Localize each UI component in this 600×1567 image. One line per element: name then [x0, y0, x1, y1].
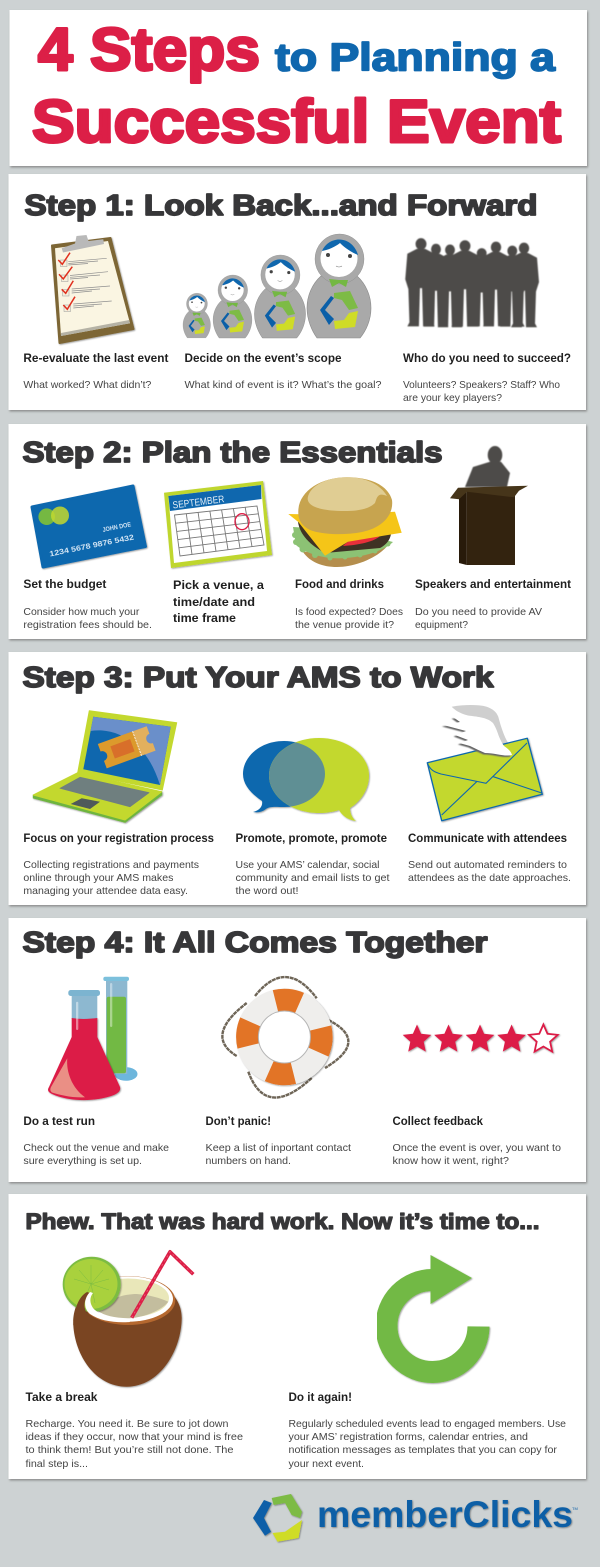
heading: step 4: Step 4: It All Comes Together: [22, 927, 488, 959]
text: communicate: Send out automated reminders to: [408, 859, 567, 871]
text: do it again: your AMS’ registration forms, calendar entries, and: [288, 1431, 528, 1443]
heading: step 1: Step 1: Look Back...and Forward: [24, 190, 538, 222]
text: feedback: [392, 1114, 561, 1167]
text: who: [403, 351, 571, 404]
text: budget: Set the budget: [23, 577, 106, 591]
heading: step 3: Step 3: Put Your AMS to Work: [22, 662, 494, 694]
text: speakers: Speakers and entertainment: [415, 577, 571, 591]
text: registration: managing your attendee data easy.: [23, 885, 188, 897]
text: food: Is food expected? Does: [295, 606, 403, 618]
text: take a break: [26, 1390, 243, 1470]
text: re-evaluate: [23, 351, 168, 391]
text: scope: Decide on the event’s scope: [184, 351, 342, 365]
text: scope: [184, 351, 382, 391]
logo wordmark: memberClicks: [317, 1494, 573, 1535]
icon: credit card: JOHN DOE: [102, 521, 132, 534]
text: budget: registration fees should be.: [23, 619, 152, 631]
text: speakers: [415, 577, 571, 631]
heading: closing: Phew. That was hard work. Now it’s time to...: [26, 1209, 540, 1234]
title: to Planning a: to Planning a: [275, 36, 555, 80]
logo: memberClicks: [253, 1494, 578, 1542]
text: budget: [23, 577, 152, 631]
text: scope: What kind of event is it? What’s the goal?: [184, 379, 382, 391]
icon: nesting dolls: [183, 234, 371, 338]
text: promote: [236, 831, 390, 897]
icon: speaker at podium: [450, 446, 528, 565]
text: feedback: Collect feedback: [392, 1114, 483, 1128]
icon: speech bubbles: [243, 738, 369, 821]
text: communicate: Communicate with attendees: [408, 831, 567, 845]
panel: step 1: [8, 174, 587, 412]
text: communicate: attendees as the date approaches.: [408, 872, 571, 884]
title: 4 Steps: 4 Steps: [38, 16, 260, 83]
text: do it again: Do it again!: [288, 1390, 352, 1404]
text: don't panic: [206, 1114, 351, 1167]
text: promote: the word out!: [236, 885, 298, 897]
text: venue: [173, 578, 264, 625]
trademark: TM: [572, 1506, 578, 1511]
text: take a break: final step is...: [26, 1458, 88, 1470]
panel: step 3: [8, 652, 587, 906]
text: food: Food and drinks: [295, 577, 384, 591]
icon: four of five stars: [403, 1024, 558, 1052]
text: test run: sure everything is set up.: [23, 1155, 142, 1167]
icon: life preserver: [222, 977, 348, 1098]
text: do it again: [288, 1390, 566, 1470]
panel: title: [10, 10, 588, 168]
text: re-evaluate: Re-evaluate the last event: [23, 351, 168, 365]
logo mark: [253, 1494, 302, 1542]
text: budget: Consider how much your: [23, 606, 140, 618]
panel: step 4: [8, 918, 587, 1184]
text: promote: community and email lists to get: [236, 872, 390, 884]
text: do it again: notification messages as templates that you can copy for: [288, 1444, 558, 1456]
text: do it again: your next event.: [288, 1458, 364, 1470]
icon: calendar: SEPTEMBER: [172, 494, 225, 511]
text: venue: time/date and: [173, 595, 255, 609]
text: take a break: ideas if they occur, now that your mind is free: [26, 1431, 243, 1443]
text: take a break: Recharge. You need it. Be sure to jot down: [26, 1418, 229, 1430]
text: registration: Collecting registrations and payments: [23, 859, 199, 871]
heading: step 2: Step 2: Plan the Essentials: [22, 437, 442, 469]
icon: burger: [288, 477, 402, 567]
icon: credit card: [32, 486, 146, 567]
icon: credit card: 1234 5678 9876 5432: [49, 532, 135, 558]
text: communicate: [408, 831, 571, 884]
text: do it again: Regularly scheduled events lead to engaged members. Use: [288, 1418, 566, 1430]
text: feedback: know how it went, right?: [392, 1155, 509, 1167]
icon: flasks: [48, 977, 138, 1100]
text: test run: Check out the venue and make: [23, 1142, 169, 1154]
text: take a break: Take a break: [26, 1390, 98, 1404]
text: registration: online through your AMS makes: [23, 872, 173, 884]
icon: winged envelope: [427, 705, 542, 821]
text: food: the venue provide it?: [295, 619, 394, 631]
text: venue: time frame: [173, 611, 236, 625]
text: registration: Focus on your registration process: [23, 831, 214, 845]
text: venue: Pick a venue, a: [173, 578, 264, 592]
panel: closing: [8, 1194, 587, 1480]
text: promote: Promote, promote, promote: [236, 831, 387, 845]
icon: repeat arrow: [387, 1255, 478, 1372]
icon: laptop: [33, 711, 177, 822]
text: who: Who do you need to succeed?: [403, 351, 571, 365]
panel: step 2: [8, 424, 587, 640]
text: don't panic: Don’t panic!: [206, 1114, 271, 1128]
text: feedback: Once the event is over, you want to: [392, 1142, 561, 1154]
text: promote: Use your AMS’ calendar, social: [236, 859, 380, 871]
text: take a break: to think them! But you’re still not done. The: [26, 1444, 234, 1456]
text: don't panic: Keep a list of inportant contact: [206, 1142, 351, 1154]
icon: coconut drink: [63, 1252, 193, 1387]
text: who: Volunteers? Speakers? Staff? Who: [403, 379, 560, 391]
text: don't panic: numbers on hand.: [206, 1155, 291, 1167]
title: Successful Event: Successful Event: [32, 88, 561, 155]
icon: calendar: [164, 481, 272, 568]
text: registration: [23, 831, 214, 897]
text: food: [295, 577, 403, 631]
text: test run: [23, 1114, 169, 1167]
text: who: are your key players?: [403, 392, 502, 404]
text: re-evaluate: What worked? What didn’t?: [23, 379, 152, 391]
text: speakers: equipment?: [415, 619, 468, 631]
icon: clipboard: [52, 235, 134, 343]
text: speakers: Do you need to provide AV: [415, 606, 542, 618]
icon: crowd silhouette: [405, 238, 539, 327]
text: test run: Do a test run: [23, 1114, 95, 1128]
